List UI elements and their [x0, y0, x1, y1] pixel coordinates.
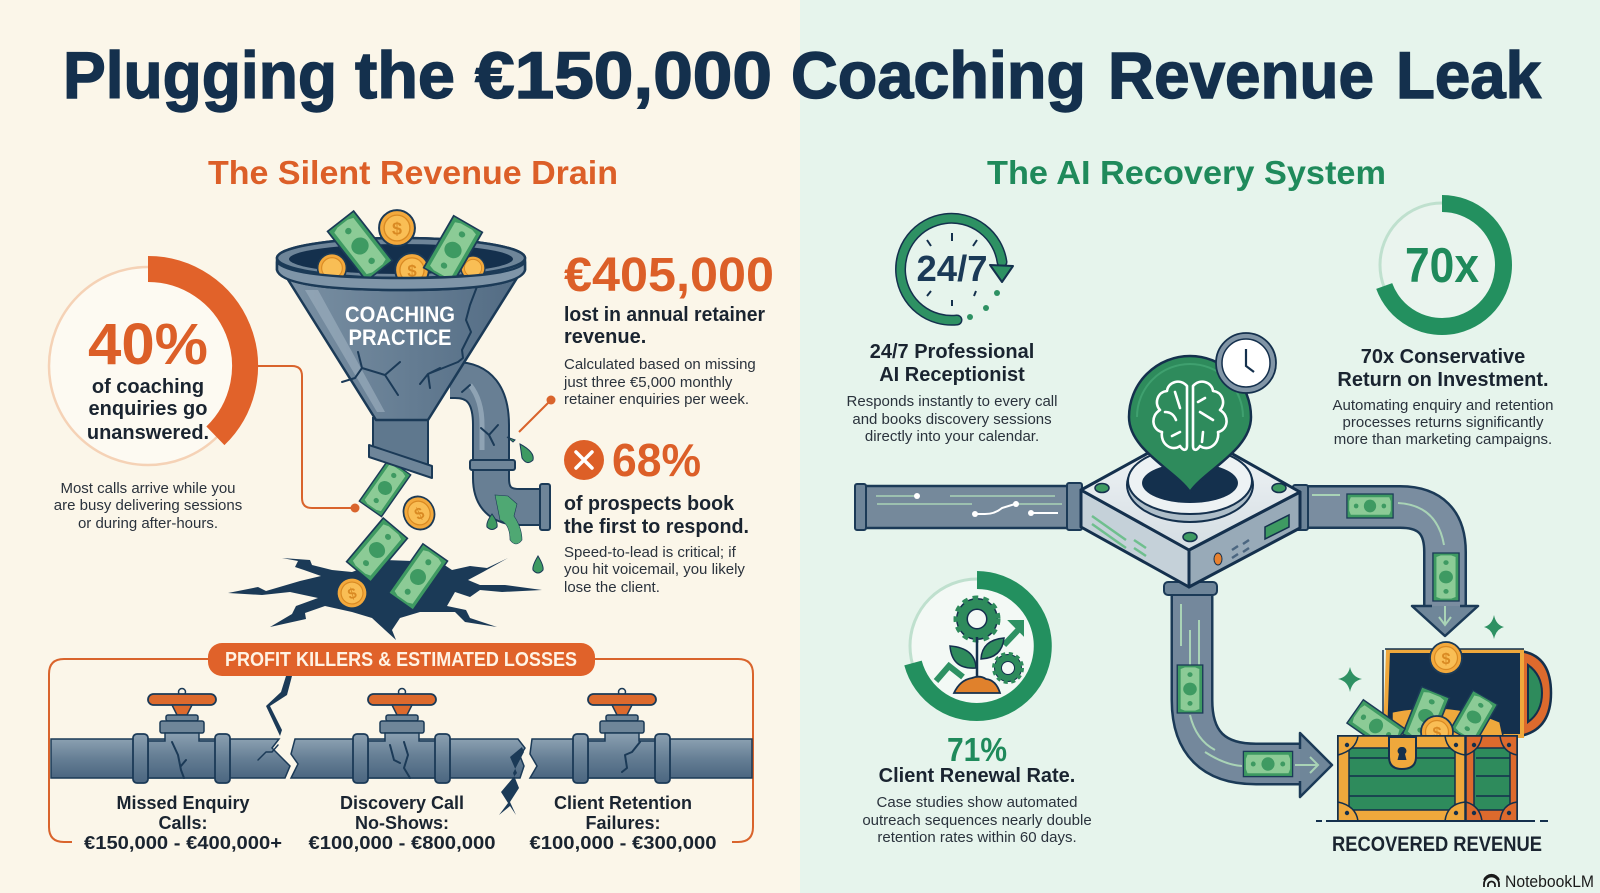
stat value: 68% — [612, 434, 701, 486]
chest body — [1338, 736, 1517, 821]
stat explanation: Speed-to-lead is critical; if — [564, 544, 737, 561]
falling coin: $ — [412, 505, 427, 524]
funnel label: COACHING — [345, 302, 455, 327]
frame — [49, 659, 753, 842]
description: more than marketing campaigns. — [1334, 431, 1552, 448]
stat heading: lost in annual retainer — [564, 304, 765, 326]
panel: 24/7 receptionist — [847, 218, 1057, 445]
chest label: RECOVERED REVENUE — [1332, 833, 1542, 856]
loss label 1: Missed Enquiry — [116, 793, 250, 813]
coins in funnel — [318, 253, 485, 287]
illustration: treasure chest — [1316, 615, 1551, 856]
coin on lid — [1430, 642, 1462, 674]
spout collar — [369, 445, 432, 478]
heading: AI recovery system: The AI Recovery System — [987, 154, 1386, 191]
title: Leak — [1396, 38, 1541, 112]
banknote horizontal — [1243, 751, 1293, 777]
coin on top: $ — [392, 219, 402, 239]
banknote in funnel left — [328, 211, 392, 281]
description: Case studies show automated — [877, 794, 1077, 811]
banknote on vertical pipe — [1433, 553, 1459, 601]
stat caption: enquiries go — [89, 398, 207, 420]
chest lid — [1385, 651, 1522, 736]
donut gauge: 70x: 70x — [1405, 239, 1479, 293]
fallen coin — [333, 574, 371, 612]
panel: 71% renewal — [862, 579, 1092, 846]
pill heading — [208, 643, 595, 676]
banknote in funnel right — [424, 216, 482, 284]
stat explanation: Calculated based on missing — [564, 356, 756, 373]
description: processes returns significantly — [1343, 414, 1544, 431]
funnel cone — [287, 278, 517, 420]
ground crack — [228, 558, 542, 640]
stat explanation: just three €5,000 monthly — [563, 374, 733, 391]
coin in chest — [1421, 716, 1453, 748]
stat explanation: are busy delivering sessions — [54, 497, 242, 514]
falling coin — [398, 491, 440, 535]
coin on top — [379, 210, 415, 246]
loss label 2: €100,000 - €800,000 — [308, 833, 496, 853]
funnel label: PRACTICE — [348, 325, 452, 350]
description: outreach sequences nearly double — [862, 812, 1092, 829]
fallen banknote right — [389, 544, 447, 610]
valve 1 — [133, 688, 230, 783]
stat heading — [564, 304, 765, 348]
output pipe down to chest — [1164, 582, 1332, 797]
description: directly into your calendar. — [865, 428, 1039, 445]
title: Revenue — [1108, 38, 1374, 112]
green leak — [495, 495, 522, 544]
loss label 3: Failures: — [585, 813, 661, 833]
stat heading: the first to respond. — [564, 516, 749, 538]
lock — [1389, 737, 1416, 769]
donut gauge: 40% — [49, 267, 247, 465]
heading: AI Receptionist — [879, 364, 1025, 386]
loss label 1: €150,000 - €400,000+ — [84, 833, 282, 853]
heading: silent revenue drain: The Silent Revenue Drain — [208, 154, 618, 191]
loss label 2: No-Shows: — [355, 813, 449, 833]
panel: 40% unanswered stat — [49, 267, 360, 532]
icon: brain — [1153, 382, 1227, 450]
pipeline — [51, 739, 752, 778]
loss label 3: Client Retention — [554, 793, 692, 813]
funnel label — [345, 302, 455, 350]
heading: Return on Investment. — [1337, 369, 1549, 391]
donut gauge: 70x — [1380, 203, 1504, 327]
illustration: leaking funnel — [228, 210, 556, 640]
stat explanation: lose the client. — [564, 579, 660, 596]
banknote vertical — [1177, 665, 1203, 713]
stat caption: unanswered. — [87, 422, 209, 444]
valve 3 — [573, 688, 670, 783]
front rim covering contents — [277, 262, 525, 290]
valve 2 — [353, 688, 450, 783]
watermark: NotebookLM: NotebookLM — [1505, 872, 1594, 891]
stat heading: revenue. — [564, 326, 646, 348]
loss label 3 — [530, 793, 716, 853]
funnel rim — [277, 238, 525, 290]
illustration: AI recovery pipeline — [855, 333, 1478, 797]
panel: 405,000 stat — [563, 249, 774, 408]
crack lower — [499, 747, 524, 815]
stat explanation: you hit voicemail, you likely — [564, 561, 745, 578]
coin on lid: $ — [1442, 651, 1451, 668]
sparkle — [1338, 667, 1362, 692]
AI location pin — [1129, 333, 1276, 492]
ground line — [1316, 820, 1548, 822]
icon: x circle — [564, 440, 604, 480]
title: €150,000 — [475, 38, 772, 112]
input pipe — [855, 483, 1082, 530]
panel: 70x ROI — [1333, 203, 1553, 448]
description: Responds instantly to every call — [847, 393, 1057, 410]
fallen banknote left — [347, 518, 407, 582]
heading: Client Renewal Rate. — [879, 765, 1075, 787]
title — [63, 38, 1541, 112]
loss label 2: Discovery Call — [340, 793, 464, 813]
description: and books discovery sessions — [852, 411, 1052, 428]
funnel spout — [373, 418, 428, 468]
loss label 3: €100,000 - €300,000 — [530, 833, 716, 853]
icon: 24/7 clock — [901, 218, 1013, 320]
stat: 40%: 40% — [88, 312, 208, 377]
coins in funnel: $ — [407, 261, 417, 280]
stat explanation: or during after-hours. — [78, 515, 218, 532]
stat heading — [564, 493, 749, 538]
drops — [487, 437, 543, 573]
pill heading: PROFIT KILLERS & ESTIMATED LOSSES — [225, 649, 577, 671]
icon: clock — [1216, 333, 1276, 393]
description: retention rates within 60 days. — [877, 829, 1077, 846]
crack on first pipe — [258, 745, 278, 760]
fallen coin: $ — [346, 585, 359, 603]
banknote on horizontal pipe — [1347, 494, 1393, 518]
panel: 68% stat — [564, 434, 749, 596]
connector line to funnel — [258, 366, 360, 512]
callout line to leak — [519, 396, 556, 432]
title: the — [355, 38, 455, 112]
icon: growth plant and gears — [936, 598, 1022, 693]
output pipe to chest right — [1293, 485, 1478, 636]
title: Plugging — [63, 38, 337, 112]
stat caption: of coaching — [92, 376, 204, 398]
donut gauge: 71% — [910, 579, 1044, 713]
banknote in chest — [1403, 687, 1449, 745]
loss label 1: Calls: — [158, 813, 208, 833]
loss label 1 — [84, 793, 282, 853]
treasure coins — [1392, 708, 1503, 736]
banknote in chest — [1450, 690, 1498, 744]
chest lid side — [1520, 651, 1551, 736]
loss label 2 — [308, 793, 496, 853]
banknote in chest left — [1347, 700, 1405, 752]
panel: profit killers — [49, 643, 753, 853]
stat value: 71% — [947, 731, 1007, 768]
falling banknote — [359, 459, 411, 517]
AI hub machine — [1081, 430, 1300, 587]
description: Automating enquiry and retention — [1333, 397, 1553, 414]
crack upper — [266, 676, 292, 736]
icon: 24/7 clock: 24/7 — [916, 248, 988, 289]
stat explanation: retainer enquiries per week. — [564, 391, 749, 408]
stat value: €405,000 — [564, 249, 774, 302]
heading: 24/7 Professional — [870, 341, 1034, 363]
title: Coaching — [791, 38, 1086, 112]
elbow outlet pipe — [450, 380, 550, 530]
stat heading: of prospects book — [564, 493, 735, 515]
funnel cracks — [342, 284, 478, 395]
heading: 70x Conservative — [1361, 346, 1525, 368]
coin in chest: $ — [1433, 725, 1442, 742]
sparkle — [1484, 615, 1504, 639]
stat explanation: Most calls arrive while you — [60, 480, 236, 497]
